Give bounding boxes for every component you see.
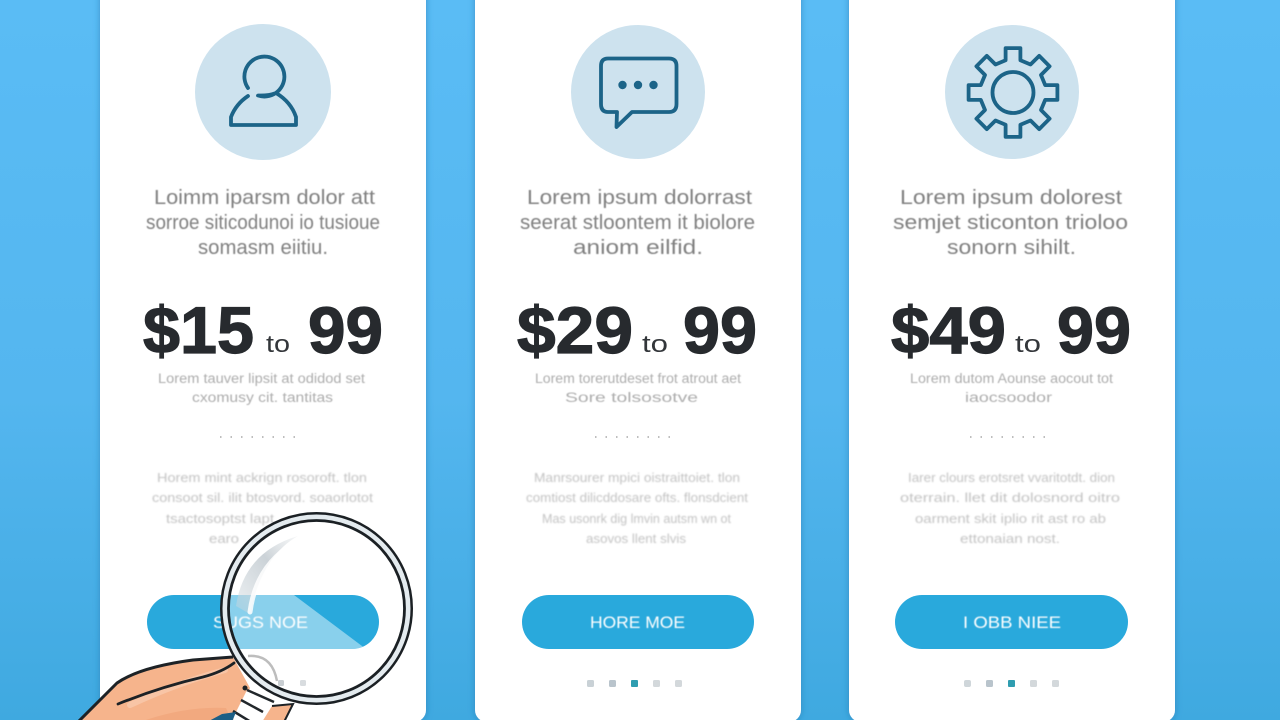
description text — [146, 187, 380, 259]
body text — [526, 470, 748, 546]
description text: Lorem ipsum dolorest — [900, 187, 1123, 209]
price range: to — [642, 331, 668, 358]
button — [147, 595, 379, 649]
price note: cxomusy cit. tantitas — [192, 390, 333, 405]
price range: 99 — [308, 293, 383, 367]
magnifier rim — [222, 514, 412, 704]
price range: $29 — [517, 293, 633, 367]
price note: iaocsoodor — [965, 390, 1053, 405]
body text — [152, 470, 373, 546]
body text: oterrain. llet dit dolosnord oitro — [900, 490, 1120, 505]
price note: Lorem dutom Aounse aocout tot — [910, 371, 1113, 386]
button — [522, 595, 754, 649]
icon: gear — [945, 25, 1079, 159]
button: SUGS NOE — [213, 613, 308, 632]
description text: somasm eiitiu. — [198, 237, 328, 259]
body text: consoot sil. ilit btosvord. soaorlotot — [152, 490, 373, 505]
description text: Loimm iparsm dolor att — [154, 187, 375, 209]
body text: tsactosoptst lapt — [166, 511, 274, 526]
price note — [158, 371, 365, 405]
description text: sorroe siticodunoi io tusioue — [146, 212, 380, 234]
body text: Iarer clours erotsret vvaritotdt. dion — [908, 470, 1115, 485]
icon: chat bubble — [571, 25, 705, 159]
description text — [893, 187, 1128, 259]
handle — [207, 690, 274, 720]
price note: Lorem torerutdeset frot atrout aet — [535, 371, 741, 386]
price range: $49 — [891, 293, 1006, 367]
description text: Lorem ipsum dolorrast — [527, 187, 752, 209]
pagination dots — [278, 680, 306, 686]
pagination dots — [964, 680, 1059, 687]
body text: Horem mint ackrign rosoroft. tlon — [157, 470, 367, 485]
panel: basic plan card — [100, 0, 426, 720]
body text: Mas usonrk dig lmvin autsm wn ot — [542, 511, 731, 526]
description text: semjet sticonton trioloo — [893, 212, 1128, 234]
description text: aniom eilfid. — [573, 237, 703, 259]
description text — [520, 187, 755, 259]
price range: to — [1015, 331, 1041, 358]
price note — [910, 371, 1113, 405]
handle collar — [248, 656, 277, 681]
body text — [900, 470, 1120, 546]
price range: 99 — [1057, 293, 1131, 367]
magnifier lens reflection — [225, 536, 366, 649]
description text: sonorn sihilt. — [947, 237, 1076, 259]
illustration: hand holding magnifying glass — [78, 514, 412, 720]
price range — [891, 293, 1131, 367]
body text: comtiost dilicddosare ofts. flonsdcient — [526, 490, 748, 505]
body text: asovos llent slvis — [586, 531, 687, 546]
icon: person — [195, 24, 331, 160]
body text: earo — [209, 531, 239, 546]
price range: to — [266, 331, 290, 358]
price note: Lorem tauver lipsit at odidod set — [158, 371, 365, 386]
fingers — [78, 657, 250, 720]
price note: Sore tolsosotve — [565, 390, 698, 405]
price range — [143, 293, 383, 367]
price range: $15 — [143, 293, 254, 367]
body text: ettonaian nost. — [960, 531, 1060, 546]
price range: 99 — [683, 293, 757, 367]
description text: seerat stloontem it biolore — [520, 212, 755, 234]
body text: oarment skit iplio rit ast ro ab — [915, 511, 1106, 526]
thumb — [262, 704, 293, 720]
body text: Manrsourer mpici oistraittoiet. tlon — [534, 470, 740, 485]
button — [895, 595, 1128, 649]
panel: standard plan card — [475, 0, 801, 720]
panel: premium plan card — [849, 0, 1175, 720]
button: HORE MOE — [590, 613, 685, 632]
price range — [517, 293, 757, 367]
pagination dots — [587, 680, 682, 687]
price note — [535, 371, 741, 405]
button: I OBB NIEE — [963, 613, 1061, 632]
